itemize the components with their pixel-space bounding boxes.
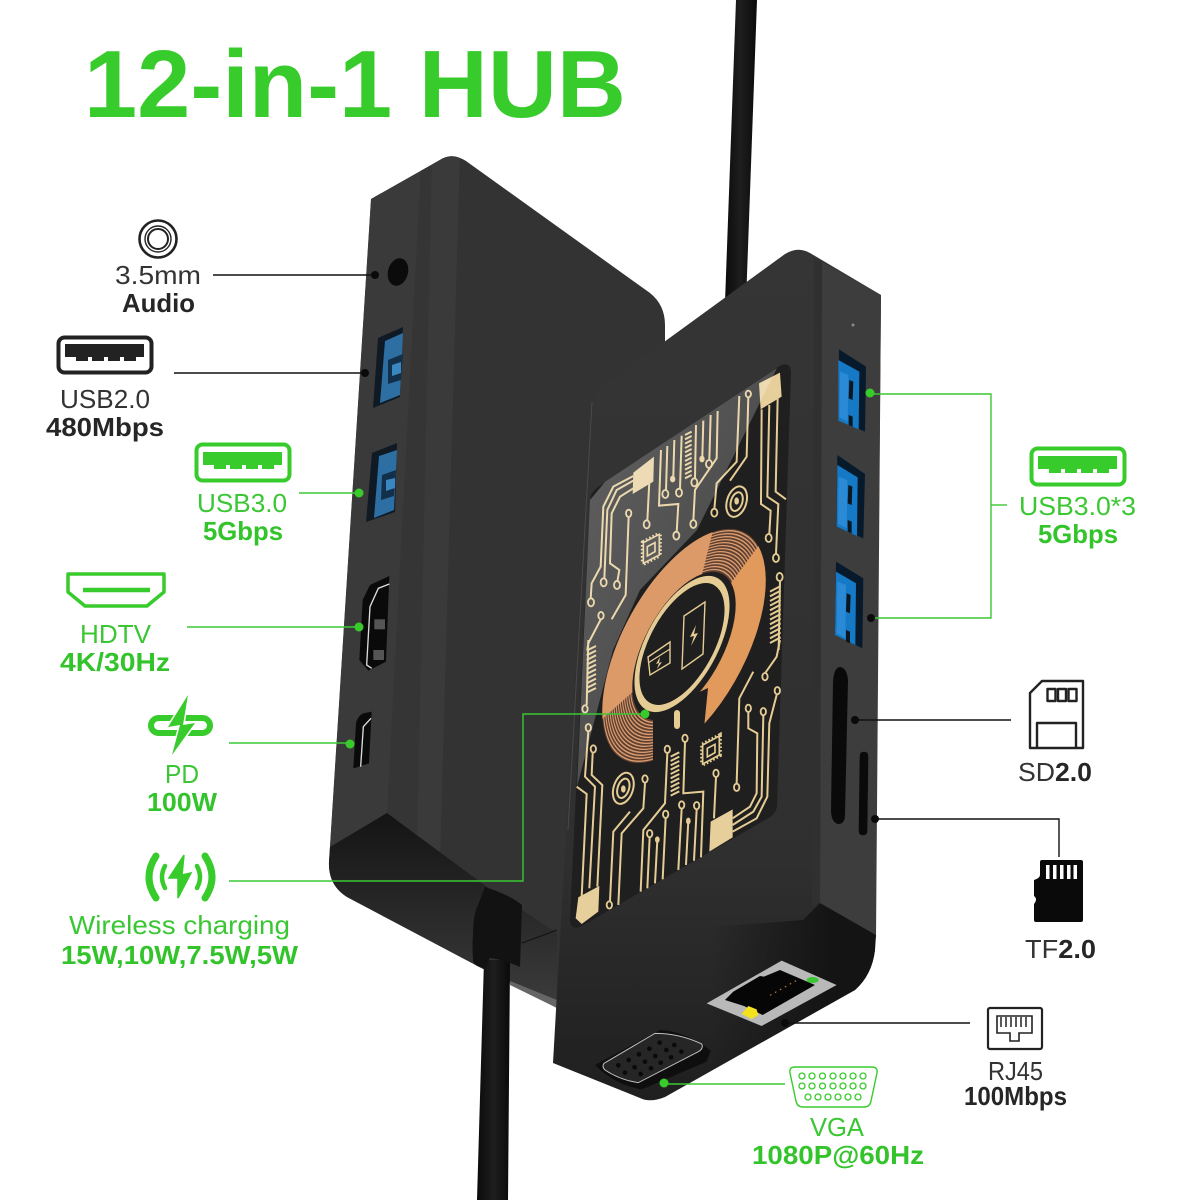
- gold ring: [633, 557, 731, 731]
- leader line: [871, 815, 1059, 857]
- charging coil: [596, 490, 772, 802]
- front hub body: [553, 250, 881, 1100]
- vga port: [595, 1030, 711, 1089]
- icon: hdmi: [68, 574, 164, 606]
- usb port 3: [835, 562, 863, 648]
- text: 1080P@60Hz: 1080P@60Hz: [752, 1140, 924, 1170]
- front hub bottom cap: [700, 903, 876, 1077]
- bracket leader: [866, 388, 1007, 622]
- icon: audio jack: [140, 220, 176, 258]
- gold pill: [674, 710, 680, 729]
- wireless charging glass panel: [570, 364, 791, 928]
- leader line: [174, 369, 369, 377]
- panel glass: [570, 364, 791, 928]
- rj45 port: [707, 961, 837, 1026]
- label: sd: [851, 681, 1092, 787]
- icon: sd card: [1030, 681, 1083, 748]
- text: USB3.0: USB3.0: [197, 488, 287, 518]
- label: rj45: [781, 1008, 1067, 1111]
- usb port 2: [837, 455, 865, 538]
- text: SD2.0: SD2.0: [1018, 757, 1092, 787]
- text: 3.5mm: 3.5mm: [115, 260, 201, 290]
- text: 100Mbps: 100Mbps: [964, 1081, 1067, 1111]
- front hub device: [553, 250, 881, 1100]
- seam: [522, 930, 557, 943]
- text: TF2.0: TF2.0: [1025, 934, 1096, 964]
- label: hdtv: [60, 574, 364, 677]
- rear hub body: [329, 156, 665, 1008]
- rear usb 2.0 port: [373, 327, 403, 408]
- leader line: [851, 716, 1011, 724]
- circuit traces lower: [576, 640, 780, 924]
- text: USB2.0: USB2.0: [60, 384, 150, 414]
- label: usb3.0 x3: [866, 388, 1136, 622]
- rear hub device: [329, 150, 665, 1008]
- glass reflection: [577, 368, 777, 787]
- icon: micro sd: [1034, 860, 1083, 922]
- label: usb2.0: [46, 338, 369, 442]
- text: PD: PD: [165, 759, 199, 789]
- icon: ethernet: [988, 1008, 1042, 1049]
- label: pd: [147, 695, 354, 817]
- title: 12-in-1 HUB: [84, 31, 626, 138]
- text: VGA: VGA: [810, 1112, 865, 1142]
- icon: phone: [682, 602, 705, 669]
- icon: charging card: [648, 642, 670, 675]
- text: 4K/30Hz: 4K/30Hz: [60, 647, 170, 677]
- front hub edge line: [568, 402, 592, 830]
- leader line: [229, 740, 354, 748]
- sd card slot: [831, 667, 848, 824]
- icon: usb green: [1032, 448, 1124, 484]
- text: RJ45: RJ45: [988, 1056, 1043, 1086]
- text: HDTV: HDTV: [80, 619, 152, 649]
- tf card slot: [859, 752, 868, 835]
- rear usb-c port: [353, 712, 372, 768]
- icon: usb: [58, 338, 152, 372]
- circuit traces upper: [587, 373, 786, 650]
- icon: usb-c bolt: [151, 695, 210, 755]
- text: Wireless charging: Wireless charging: [69, 910, 290, 940]
- leader line: [229, 710, 650, 881]
- text: Audio: Audio: [122, 288, 195, 318]
- text: wattages: 15W,10W,7.5W,5W: [61, 940, 298, 970]
- rear audio jack: [385, 256, 411, 288]
- leader line: [299, 488, 364, 498]
- text: 5Gbps: 5Gbps: [203, 516, 283, 546]
- front hub ridge: [812, 258, 822, 906]
- leader line: [660, 1078, 785, 1088]
- label: 3.5mm audio: [115, 220, 379, 318]
- rear hdmi port: [359, 576, 389, 671]
- rear hub bottom strip: [510, 981, 557, 1008]
- icon: vga connector: [790, 1067, 877, 1107]
- leader line: [187, 622, 364, 632]
- usb 3.0 ports right: [835, 349, 866, 648]
- indicator led: [852, 324, 854, 326]
- icon: wireless bolt: [149, 855, 212, 898]
- text: 5Gbps: 5Gbps: [1038, 519, 1118, 549]
- front hub right side: [820, 262, 881, 938]
- leader line: [213, 271, 379, 279]
- cable: [477, 960, 510, 1200]
- label: vga: [660, 1067, 924, 1170]
- text: USB3.0*3: USB3.0*3: [1019, 491, 1136, 521]
- label: tf: [871, 815, 1096, 964]
- icon: usb green: [196, 444, 290, 480]
- rear usb 3.0 port: [366, 443, 397, 522]
- label: usb3.0: [196, 444, 364, 546]
- leader line: [781, 1019, 970, 1027]
- strain relief: [472, 887, 522, 968]
- usb port 1: [838, 349, 866, 432]
- rear hub side bands: [330, 150, 460, 862]
- text: 100W: 100W: [147, 787, 217, 817]
- top cable: [724, 0, 757, 330]
- rear hub bottom cap: [329, 813, 557, 1008]
- coil gap: [653, 688, 708, 778]
- label: wireless charging: [61, 710, 650, 970]
- text: 480Mbps: 480Mbps: [46, 412, 164, 442]
- bottom cable: [472, 887, 522, 1200]
